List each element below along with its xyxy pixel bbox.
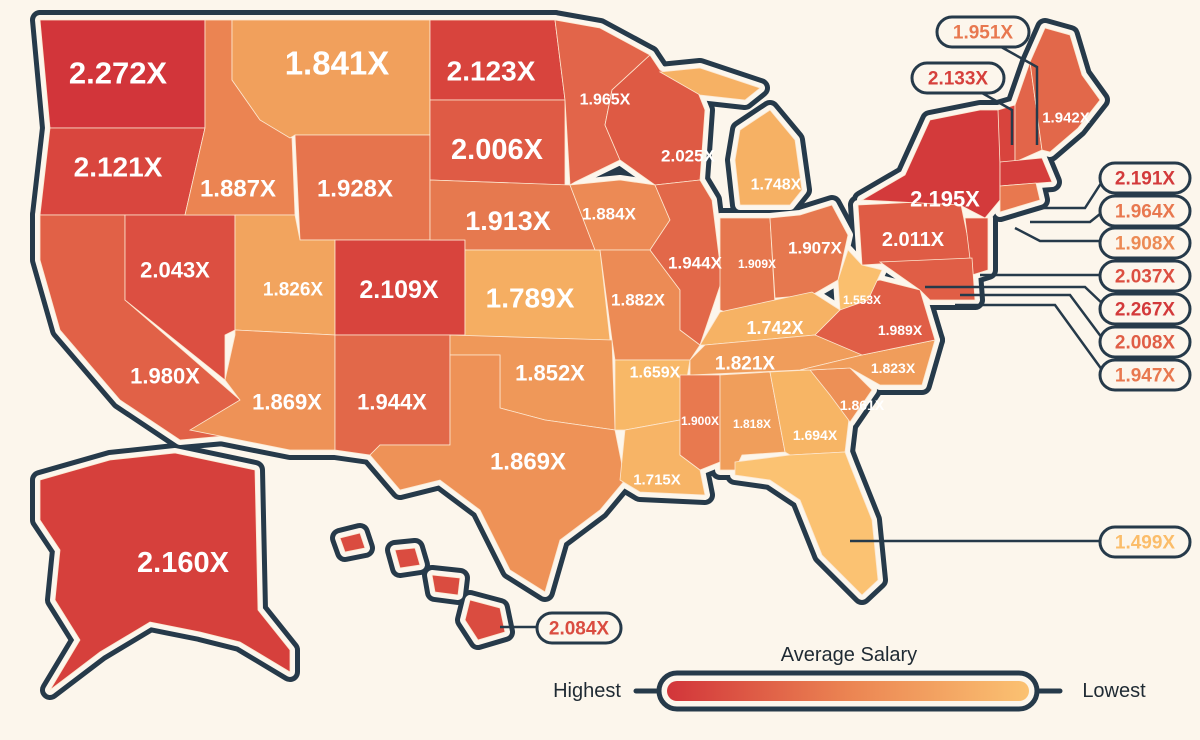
- state value labels: 1.882X: [611, 290, 666, 310]
- state value labels: 1.852X: [515, 360, 585, 386]
- callout pills: 1.964X: [1115, 202, 1175, 222]
- legend: Highest: [553, 680, 621, 702]
- state value labels: 2.043X: [140, 258, 210, 282]
- state value labels: 1.818X: [733, 417, 771, 431]
- state value labels: 1.841X: [285, 44, 389, 82]
- legend: Average Salary: [781, 644, 917, 666]
- callout pills: 2.133X: [928, 68, 988, 90]
- state value labels: 1.823X: [871, 360, 916, 376]
- state value labels: 1.694X: [793, 427, 838, 443]
- state value labels: 1.821X: [715, 354, 775, 374]
- state value labels: 2.123X: [447, 56, 536, 86]
- state value labels: 1.980X: [130, 364, 200, 388]
- state value labels: 2.272X: [69, 56, 167, 90]
- state value labels: 1.907X: [788, 238, 843, 258]
- callout pills: 2.008X: [1115, 332, 1175, 354]
- callout pills: 2.037X: [1115, 266, 1175, 288]
- state value labels: 1.928X: [317, 176, 393, 202]
- callout leader lines: [500, 38, 1105, 627]
- state value labels: 2.160X: [137, 547, 230, 579]
- legend: [553, 644, 1146, 709]
- state value labels: 1.869X: [252, 390, 322, 414]
- state value labels: 1.715X: [633, 472, 681, 488]
- callout pills: 1.908X: [1115, 234, 1175, 254]
- callout pills: [537, 17, 1190, 643]
- state value labels: 1.789X: [486, 282, 575, 314]
- state value labels: 1.944X: [357, 390, 427, 414]
- state value labels: 1.942X: [1042, 110, 1090, 126]
- callout pills: 1.951X: [953, 22, 1013, 44]
- state value labels: 1.913X: [465, 206, 551, 236]
- state value labels: 2.006X: [451, 134, 544, 166]
- state value labels: 1.965X: [580, 92, 631, 108]
- state value labels: 2.195X: [910, 186, 980, 212]
- state value labels: 2.121X: [74, 152, 163, 182]
- state value labels: [69, 44, 1090, 579]
- state value labels: 2.109X: [359, 276, 439, 304]
- state value labels: 1.900X: [681, 414, 719, 428]
- state value labels: 1.884X: [582, 204, 637, 224]
- state value labels: 1.748X: [751, 176, 802, 194]
- state value labels: 1.869X: [490, 448, 566, 476]
- state value labels: 2.025X: [661, 146, 716, 166]
- state value labels: 1.944X: [668, 254, 723, 272]
- state value labels: 2.011X: [882, 229, 945, 251]
- state value labels: 1.826X: [263, 280, 323, 300]
- callout pills: 2.084X: [549, 618, 609, 640]
- legend: Lowest: [1082, 680, 1146, 702]
- state value labels: 1.989X: [878, 322, 923, 338]
- callout pills: 1.947X: [1115, 366, 1175, 386]
- callout pills: 2.267X: [1115, 300, 1175, 320]
- state value labels: 1.742X: [746, 318, 804, 338]
- state value labels: 1.909X: [738, 257, 776, 271]
- state value labels: 1.887X: [200, 176, 276, 202]
- state value labels: 1.659X: [630, 364, 681, 382]
- state value labels: 1.861X: [840, 397, 885, 413]
- callout pills: 1.499X: [1115, 532, 1175, 554]
- map: state shapes: [40, 20, 1100, 690]
- state value labels: 1.553X: [843, 293, 881, 307]
- callout pills: 2.191X: [1115, 168, 1175, 190]
